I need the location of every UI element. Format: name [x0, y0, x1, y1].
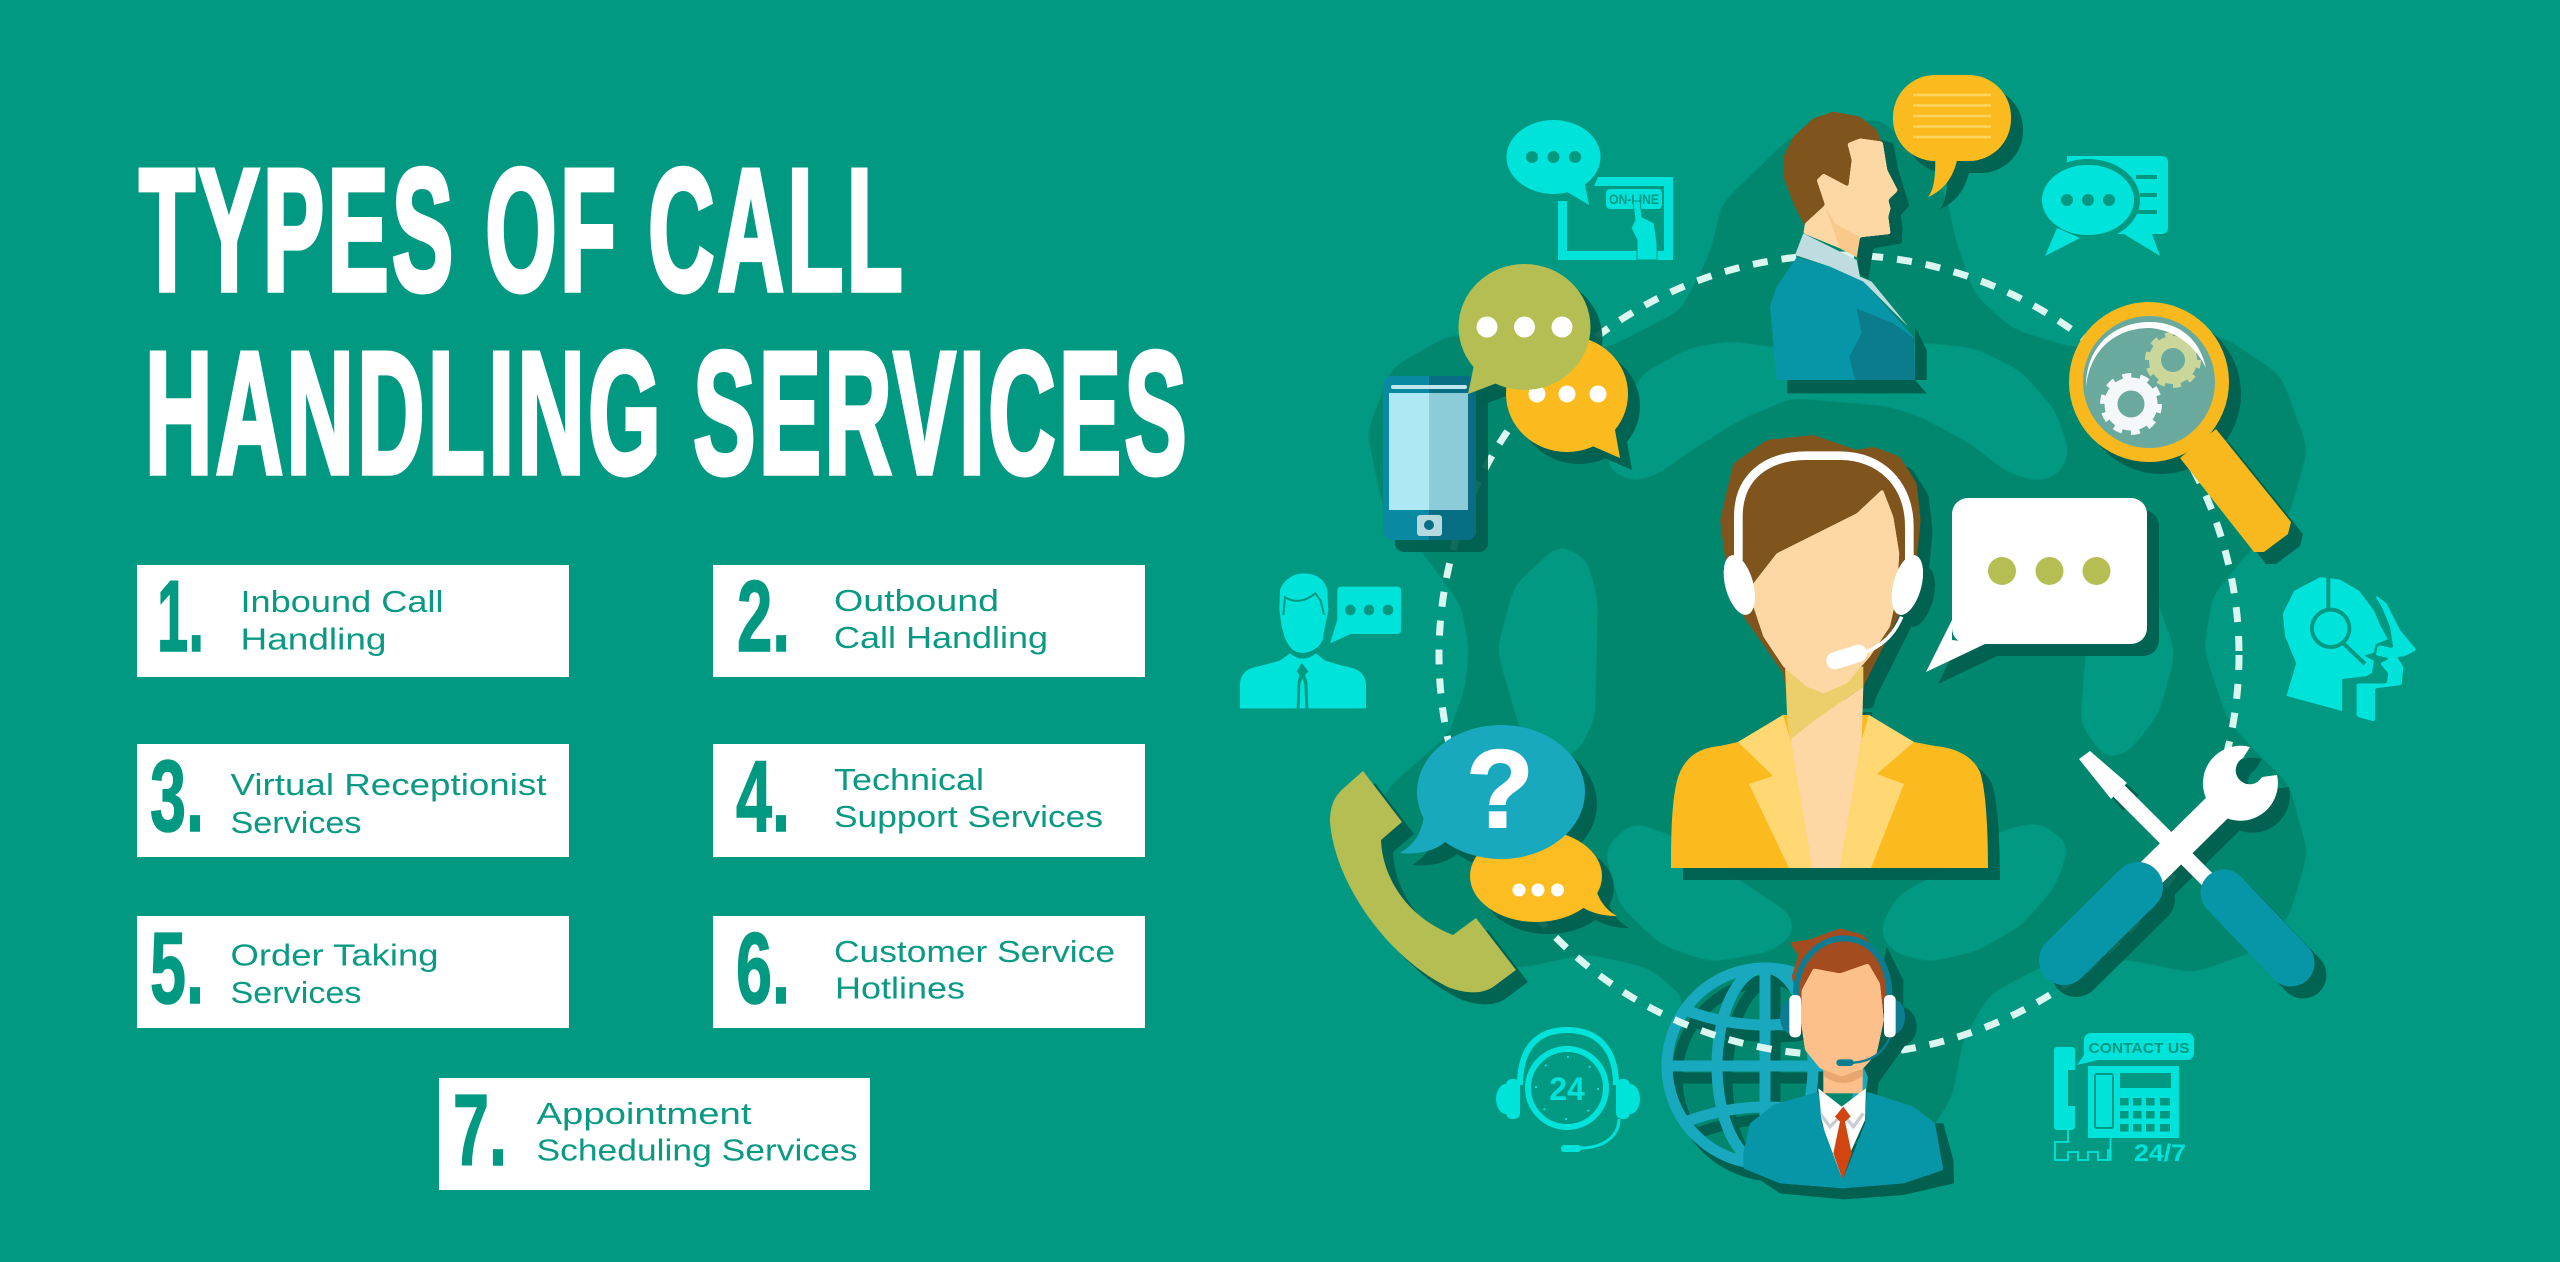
icon: magnifying glass with gears [2069, 302, 2291, 552]
card 5: Order Taking Services: Services [230, 975, 362, 1010]
speech bubbles: question and yellow [1400, 725, 1617, 922]
speech bubble: yellow lines [1893, 75, 2011, 197]
card 5: Order Taking Services: Order Taking [230, 938, 438, 972]
woman body [1671, 700, 1988, 868]
card 7: Appointment Scheduling Services [439, 1075, 870, 1190]
agent face [1801, 963, 1884, 1077]
face [1803, 138, 1898, 257]
jacket [1770, 257, 1915, 380]
icon: 24 hour headset [1496, 1030, 1640, 1152]
card 2: Outbound Call Handling: Outbound [834, 583, 999, 618]
card 3: Virtual Receptionist Services: Virtual Receptionist [230, 767, 547, 802]
icon: man with chat bubble [1240, 573, 1401, 708]
card 5: Order Taking Services: 5. [150, 913, 204, 1025]
dashed connection circle [1439, 255, 2239, 1055]
card 3: Virtual Receptionist Services [137, 741, 569, 857]
agent jacket and shirt [1743, 1088, 1943, 1188]
card 5: Order Taking Services [137, 913, 569, 1028]
card 1: Inbound Call Handling: Handling [240, 622, 386, 656]
figure: agent with headset [1743, 928, 1954, 1199]
card 4: Technical Support Services [713, 741, 1145, 857]
speech bubble: white with dots [1926, 498, 2147, 672]
illustration background blobs [1367, 118, 2308, 1180]
card 2: Outbound Call Handling: Call Handling [834, 620, 1048, 655]
icon: telephone handset [1330, 771, 1516, 992]
card 7: Appointment Scheduling Services: Appointment [536, 1096, 752, 1131]
wrench [2064, 746, 2278, 960]
icon: chat document [2039, 156, 2168, 256]
card 4: Technical Support Services: Support Services [834, 799, 1103, 834]
screwdriver [2079, 751, 2291, 963]
card 3: Virtual Receptionist Services: 3. [150, 741, 204, 853]
agent shadow [1750, 947, 1954, 1199]
icon: 24 hour headset: 24 [1549, 1071, 1585, 1107]
question bubble: ? [1466, 728, 1534, 851]
agent hair [1789, 928, 1891, 1010]
card 1: Inbound Call Handling [137, 561, 569, 677]
white gear [2103, 376, 2159, 432]
icon: contact us desk phone: 24/7 [2134, 1140, 2186, 1167]
card 2: Outbound Call Handling [713, 561, 1145, 677]
card 6: Customer Service Hotlines: Customer Service [834, 934, 1115, 969]
agent ear pads and mic [1789, 995, 1896, 1066]
agent earpieces back [1780, 1000, 1905, 1033]
card 4: Technical Support Services: 4. [736, 741, 790, 853]
title [139, 132, 1190, 510]
headset [1718, 456, 1929, 661]
woman hair and headset shadow layer [1720, 435, 1929, 697]
figure: man in profile [1770, 112, 1927, 393]
card 3: Virtual Receptionist Services: Services [230, 805, 362, 840]
card 1: Inbound Call Handling: Inbound Call [240, 584, 444, 619]
agent neck [1823, 1067, 1863, 1093]
card 2: Outbound Call Handling: 2. [737, 561, 790, 673]
yellow bubble [1506, 336, 1628, 458]
icon: online tablet with chat bubble: ON-LINE [1609, 191, 1659, 207]
title: TYPES OF CALL [139, 132, 906, 327]
title: HANDLING SERVICES [145, 315, 1190, 510]
agent headband [1796, 938, 1889, 997]
icon: crossed wrench and screwdriver [2064, 746, 2291, 963]
card 1: Inbound Call Handling: 1. [157, 561, 204, 673]
icon: contact us desk phone: CONTACT US [2088, 1040, 2190, 1057]
icon: smartphone [1383, 376, 1476, 540]
card 6: Customer Service Hotlines: Hotlines [835, 970, 965, 1006]
lens highlight [2086, 322, 2206, 387]
shadow of man [1787, 137, 1927, 393]
hair [1783, 112, 1884, 227]
card 6: Customer Service Hotlines [713, 913, 1145, 1028]
olive bubble [1458, 264, 1590, 394]
speech bubbles: olive and yellow [1458, 264, 1628, 458]
card 4: Technical Support Services: Technical [834, 762, 984, 797]
list of services [137, 561, 1145, 1190]
yellow small bubble [1470, 830, 1617, 922]
woman neck [1785, 667, 1863, 740]
question bubble [1400, 725, 1585, 859]
card 7: Appointment Scheduling Services: 7. [453, 1075, 507, 1187]
figure: woman with headset [1671, 435, 1988, 868]
icon: agent head with headset [2282, 575, 2417, 722]
icon: online tablet with chat bubble [1506, 120, 1673, 260]
icon: contact us desk phone [2054, 1033, 2194, 1167]
green gear [2148, 335, 2198, 385]
woman face [1753, 489, 1899, 693]
card 7: Appointment Scheduling Services: Scheduling Services [536, 1132, 858, 1168]
icon: globe [1667, 968, 1873, 1176]
card 6: Customer Service Hotlines: 6. [736, 913, 790, 1025]
